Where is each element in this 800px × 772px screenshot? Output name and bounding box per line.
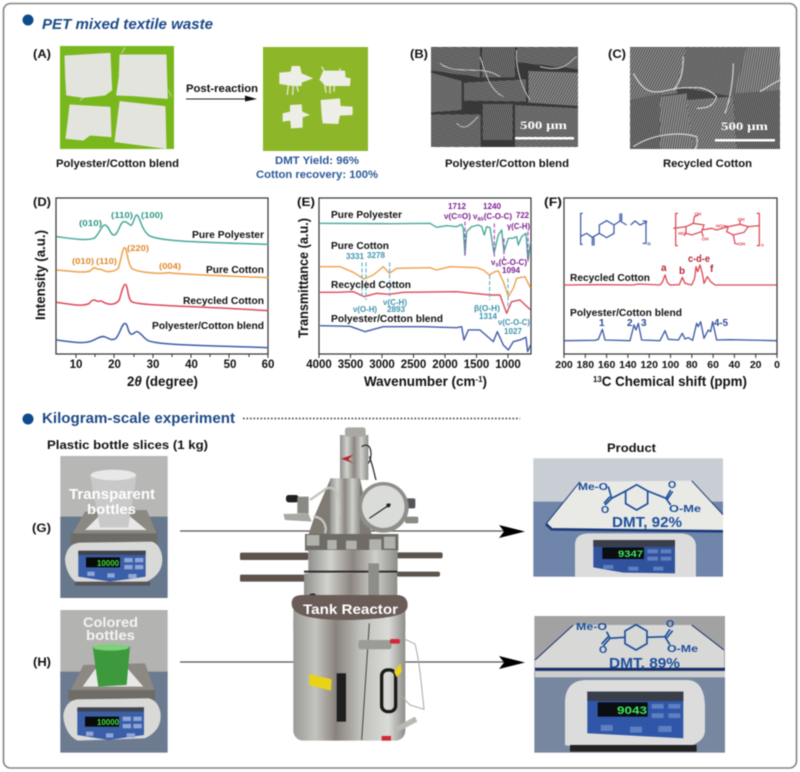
E series labels: Recycled Cotton (331, 280, 411, 291)
F axes: 200 (555, 359, 573, 371)
D peak labels: (004) (159, 261, 181, 271)
scale bar C: 500 μm (721, 119, 768, 133)
panel B: SEM polyester cotton blend (410, 47, 578, 170)
F x-axis title: 13C Chemical shift (ppm) (593, 374, 747, 389)
D y-axis title: Intensity (a.u.) (33, 230, 48, 320)
panel D: XRD chart (33, 195, 274, 389)
E purple band labels: 1712 (448, 201, 466, 211)
arrow: H to product (180, 656, 525, 669)
F peak assignments: c-d-e (688, 254, 710, 265)
reactor side rods (240, 552, 443, 582)
E purple band labels: ν (473, 211, 478, 221)
DMT labels G: DMT, 92% (612, 514, 682, 531)
F axes: 40 (729, 359, 740, 371)
scale reading: 9043 (617, 705, 647, 717)
column title: product: Product (607, 441, 656, 455)
structure: cellulose repeat unit: HO (716, 223, 723, 228)
photo H: colored bottles on scale: 10000 (97, 718, 120, 727)
F curves (564, 265, 777, 341)
photo H: colored bottles on scale: bottles (86, 627, 135, 643)
DMT labels G: O (668, 479, 676, 491)
D peak labels: (010) (79, 218, 102, 228)
D axes: 60 (262, 359, 274, 371)
photo H: colored bottles on scale (60, 610, 168, 753)
panel E: FTIR chart (296, 195, 531, 389)
DMT labels H (576, 618, 698, 672)
label C: (C) (608, 47, 626, 61)
scale reading: 9347 (618, 549, 643, 559)
F series labels: Polyester/Cotton blend (570, 308, 682, 319)
E axes: 4000 (306, 359, 332, 371)
F axes: 20 (750, 359, 762, 371)
caption: DMT yield and cotton recovery: Cotton recovery: 100% (256, 169, 378, 181)
DMT labels H: Me-O (576, 621, 607, 633)
photo: DMT product H (534, 616, 725, 753)
caption: DMT yield and cotton recovery (256, 155, 378, 181)
D series labels (152, 230, 264, 332)
arrow: post-reaction (186, 83, 258, 102)
F axes: 0 (774, 359, 780, 371)
F axes: 160 (598, 359, 616, 371)
F series labels (570, 273, 682, 319)
E series labels: Polyester/Cotton blend (331, 314, 443, 325)
caption B: Polyester/Cotton blend (445, 158, 569, 170)
structure: polyester repeat unit (580, 213, 651, 248)
E axes: 2000 (432, 359, 458, 371)
photo G: transparent bottles on scale: bottles (87, 501, 136, 517)
DMT labels G: O (601, 504, 609, 516)
F peak assignments: 1 (599, 318, 605, 329)
DMT labels H: O (666, 618, 674, 630)
reactor column (340, 427, 376, 480)
structure: cellulose repeat unit: HO (678, 231, 686, 236)
DMT labels H: O-Me (667, 643, 698, 655)
photo: DMT product G (533, 458, 723, 577)
arrow: post-reaction: Post-reaction (186, 83, 258, 95)
heading: PET mixed textile waste: PET mixed textile waste (42, 17, 213, 33)
column title: plastic bottle slices: Plastic bottle slices (1 kg) (47, 438, 208, 452)
reactor flange (304, 534, 398, 603)
reactor head and valves (283, 478, 418, 535)
D axes: 10 (70, 359, 82, 371)
arrow: G to product (180, 525, 525, 538)
E purple band labels: 1240 (483, 201, 501, 211)
F axes (555, 198, 780, 371)
structure: cellulose repeat unit: OH (702, 237, 709, 242)
reactor label: Tank Reactor (303, 601, 399, 617)
D series labels: Polyester/Cotton blend (152, 321, 264, 332)
heading: kilogram-scale experiment (22, 410, 520, 427)
D series labels: Pure Polyester (192, 230, 264, 241)
heading: kilogram-scale experiment: Kilogram-scale experiment (42, 410, 235, 427)
structure: polyester repeat unit: n (647, 242, 651, 248)
structure: cellulose repeat unit: OH (738, 217, 745, 222)
F peak assignments: 4-5 (714, 318, 728, 329)
label F: (F) (544, 195, 562, 209)
reactor jacket (292, 595, 424, 741)
E x-axis title: Wavenumber (cm-1) (364, 374, 487, 389)
E blue band labels: 3331 (346, 251, 364, 261)
DMT labels G: O-Me (669, 503, 701, 515)
D peak labels: (110) (111, 210, 133, 220)
row labels: (G) (32, 521, 51, 535)
structure: cellulose repeat unit: OH (738, 242, 746, 247)
F axes: 80 (686, 359, 698, 371)
structure: cellulose repeat unit: n (761, 242, 764, 247)
F peak assignments: f (710, 264, 714, 275)
F axes: 100 (662, 359, 679, 371)
E purple band labels: s (495, 262, 499, 268)
D axes (56, 198, 274, 371)
photo H: colored bottles on scale: Colored (83, 614, 138, 630)
E y-axis title: Transmittance (a.u.) (296, 218, 311, 338)
caption C: Recycled Cotton (663, 158, 752, 170)
E purple band labels: 1094 (502, 265, 520, 275)
scale bar B: 500 μm (520, 118, 567, 132)
photo G: transparent bottles on scale (60, 456, 168, 598)
panel F: 13C NMR chart (544, 195, 780, 389)
DMT labels H: O (599, 644, 607, 656)
photo G: transparent bottles on scale: 10000 (97, 559, 120, 568)
SEM image C (630, 47, 780, 149)
photo: tank reactor (240, 427, 443, 741)
E purple band labels: γ(C-H) (507, 221, 530, 231)
label A: (A) (33, 47, 51, 61)
DMT labels G: Me-O (578, 481, 608, 493)
E purple band labels: 722 (516, 210, 529, 220)
F peak assignments: 3 (641, 318, 647, 329)
E series labels (331, 210, 443, 325)
scale bar C (715, 119, 775, 142)
F axes: 120 (640, 359, 658, 371)
E blue band labels: 3278 (367, 250, 385, 260)
photo: polyester cotton blend swatches (60, 46, 174, 149)
DMT labels G (578, 479, 701, 531)
E axes (306, 198, 531, 371)
caption: DMT yield and cotton recovery: DMT Yield: 96% (275, 155, 359, 167)
E purple band labels: (C-O-C) (499, 257, 527, 267)
E axes: 1000 (495, 359, 521, 371)
D series labels: Recycled Cotton (183, 296, 264, 307)
E purple band labels: ν (491, 257, 496, 267)
F axes: 140 (619, 359, 637, 371)
panel A: fabric before and after reaction (33, 46, 378, 181)
scale bar B (515, 118, 574, 140)
E blue band labels: ν(C-H) (383, 297, 407, 307)
E purple band labels (444, 201, 530, 275)
D peak labels (72, 210, 181, 271)
label D: (D) (33, 195, 51, 209)
F peak assignments (599, 254, 728, 329)
D axes: 30 (147, 359, 159, 371)
label B: (B) (410, 47, 428, 61)
F series labels: Recycled Cotton (570, 273, 650, 284)
E blue band labels: 1314 (479, 311, 497, 321)
D axes: 50 (224, 359, 236, 371)
D peak labels: (220) (127, 243, 149, 253)
row labels: (H) (33, 655, 51, 669)
E series labels: Pure Cotton (331, 241, 389, 252)
photo G: transparent bottles on scale: Transparent (69, 487, 155, 503)
SEM image B (431, 47, 578, 147)
caption: polyester cotton blend: Polyester/Cotton blend (56, 158, 179, 170)
panel C: SEM recycled cotton (608, 47, 780, 170)
E blue band labels: β(O-H) (474, 303, 500, 313)
D axes: 40 (185, 359, 198, 371)
F axes: 180 (577, 359, 594, 371)
structure: cellulose repeat unit (673, 212, 764, 247)
DMT labels H: DMT, 89% (609, 655, 680, 672)
structure: cellulose repeat unit: OH (694, 212, 702, 217)
E axes: 3500 (338, 359, 363, 371)
E blue band labels: 2893 (387, 304, 405, 314)
E purple band labels: as (477, 216, 484, 222)
D peak labels: (100) (141, 210, 163, 220)
E blue band labels: ν(O-H) (353, 304, 377, 314)
F axes: 60 (707, 359, 719, 371)
D peak labels: (010) (72, 256, 94, 266)
F peak assignments: 2 (627, 318, 633, 329)
photo: residual cotton after reaction (263, 47, 368, 151)
E blue band labels (346, 250, 530, 336)
E purple band labels: (C-O-C) (484, 211, 512, 221)
row labels (32, 521, 51, 669)
E curves (320, 222, 531, 352)
F peak assignments: b (679, 266, 685, 277)
E axes: 2500 (401, 359, 426, 371)
D series labels: Pure Cotton (206, 265, 264, 276)
D peak labels: (110) (96, 256, 117, 266)
F peak assignments: a (661, 263, 667, 274)
D x-axis title: 2θ (degree) (127, 374, 198, 389)
E axes: 3000 (369, 359, 395, 371)
E blue band labels: ν(C-O-C) (498, 317, 530, 327)
D curves (57, 215, 268, 348)
D axes: 20 (108, 359, 121, 371)
pressure gauge (358, 482, 409, 533)
E purple band labels: ν(C=O) (444, 211, 471, 221)
label E: (E) (297, 195, 315, 209)
E axes: 1500 (464, 359, 489, 371)
E blue band labels: 1027 (504, 326, 522, 336)
E series labels: Pure Polyester (331, 210, 402, 221)
